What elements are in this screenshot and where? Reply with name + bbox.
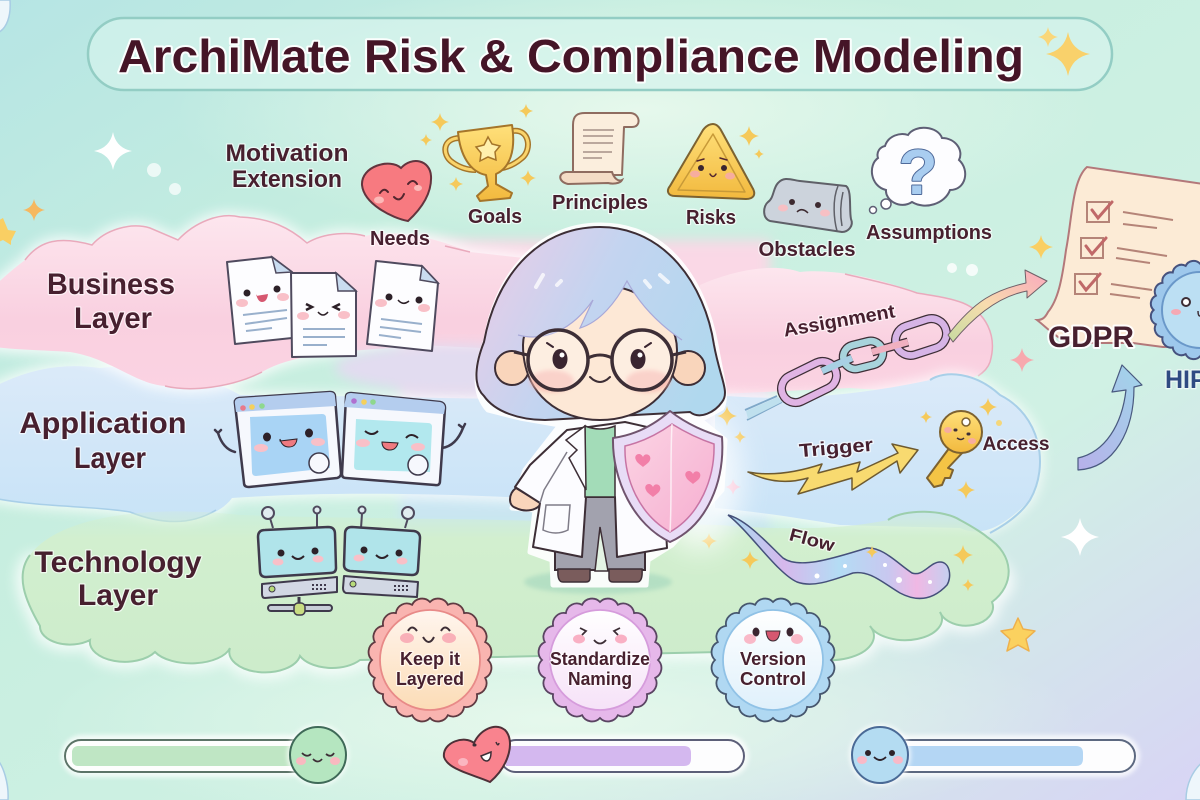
heading: application layer — [20, 407, 186, 475]
heading: technology layer: Technology — [34, 546, 202, 579]
badge: version control: Control — [740, 669, 806, 689]
ears — [495, 351, 529, 385]
badge: standardize naming: Naming — [568, 669, 632, 689]
glasses — [514, 330, 686, 390]
shoes — [558, 569, 642, 582]
panel: business layer cloud — [0, 216, 575, 392]
heading: business layer — [47, 268, 175, 335]
label: GDPR: GDPR — [1048, 321, 1134, 354]
hand — [510, 488, 541, 510]
badge: keep it layered: Layered — [396, 669, 464, 689]
pocket — [543, 505, 570, 533]
label: access: Access — [982, 434, 1050, 455]
title banner — [88, 18, 1112, 90]
progress bar: blue — [849, 724, 1140, 786]
label: version control: Version — [740, 649, 806, 669]
arrow: gradient arrow to HIPAA — [1078, 365, 1142, 470]
cheeks — [530, 370, 574, 392]
heading: application layer: Layer — [74, 442, 146, 475]
panel: business layer cloud right — [700, 268, 992, 395]
white halo under technology cloud — [23, 560, 1007, 672]
label: keep it layered: Keep it — [400, 649, 460, 669]
icon: technology servers — [258, 506, 420, 615]
label: trigger: Trigger — [798, 435, 875, 462]
character outline glow — [477, 225, 725, 585]
arrow: flow ribbon — [728, 515, 950, 598]
badge: HIPAA — [1151, 261, 1200, 394]
central colour band behind the character — [400, 240, 770, 640]
heading: motivation extension: Extension — [232, 166, 342, 193]
label: assignment: Assignment — [782, 301, 897, 342]
panel: application layer cloud right — [715, 374, 1040, 533]
label: standardize naming: Standardize — [550, 649, 650, 669]
heading: technology layer — [34, 546, 202, 612]
icon: application windows — [215, 392, 465, 487]
icon: obstacles rock — [758, 179, 856, 261]
icon: title sparkles — [1038, 27, 1090, 76]
badge: keep it layered — [369, 599, 491, 721]
icon: assumptions thought cloud — [866, 128, 992, 244]
icon: star — [1001, 618, 1035, 651]
label: risks: Risks — [686, 207, 736, 229]
hair back — [476, 227, 725, 420]
face — [523, 285, 677, 420]
fringe — [518, 243, 682, 340]
progress bar: purple — [444, 727, 749, 782]
icon: needs heart — [362, 161, 431, 250]
label: flow: Flow — [787, 524, 838, 556]
arrow: assignment chain — [745, 301, 950, 420]
icon: principles scroll — [552, 113, 648, 214]
arrow: trigger lightning — [748, 435, 918, 494]
heading: motivation extension: Motivation — [226, 140, 348, 167]
lab coat — [515, 422, 667, 557]
icon: business documents — [227, 257, 438, 357]
panel: application layer cloud — [0, 366, 570, 522]
icon: goals trophy — [445, 125, 528, 228]
panel: technology layer cloud — [23, 511, 1009, 672]
label: goals: Goals — [468, 206, 522, 228]
arrow: gradient arrow to GDPR — [948, 270, 1047, 342]
icon: risks warning triangle — [668, 124, 754, 229]
badge: standardize naming — [539, 599, 661, 721]
heading: technology layer: Layer — [78, 579, 158, 612]
heading: business layer: Business — [47, 268, 175, 301]
icon: assumptions thought cloud: ? — [898, 136, 938, 208]
title: ArchiMate Risk & Compliance Modeling — [118, 30, 1024, 82]
shield glow — [658, 410, 742, 550]
heading: application layer: Application — [20, 407, 186, 440]
character: scientist with shield — [476, 225, 725, 594]
green shirt — [585, 426, 615, 497]
label: obstacles: Obstacles — [758, 239, 856, 261]
progress bar: green — [61, 724, 349, 786]
mouth — [590, 377, 610, 382]
shield — [613, 411, 722, 542]
panel: GDPR document — [1037, 167, 1200, 354]
label: needs: Needs — [370, 228, 430, 250]
badge: version control — [712, 599, 834, 721]
heading: motivation extension — [226, 140, 348, 193]
label: principles: Principles — [552, 192, 648, 214]
ground shadow — [524, 570, 672, 594]
icon: access key — [927, 411, 1050, 487]
heading: business layer: Layer — [74, 302, 152, 335]
trousers — [555, 495, 645, 570]
label: assumptions: Assumptions — [866, 222, 992, 244]
eyes — [552, 349, 568, 369]
decorative sparkles — [0, 104, 1099, 591]
